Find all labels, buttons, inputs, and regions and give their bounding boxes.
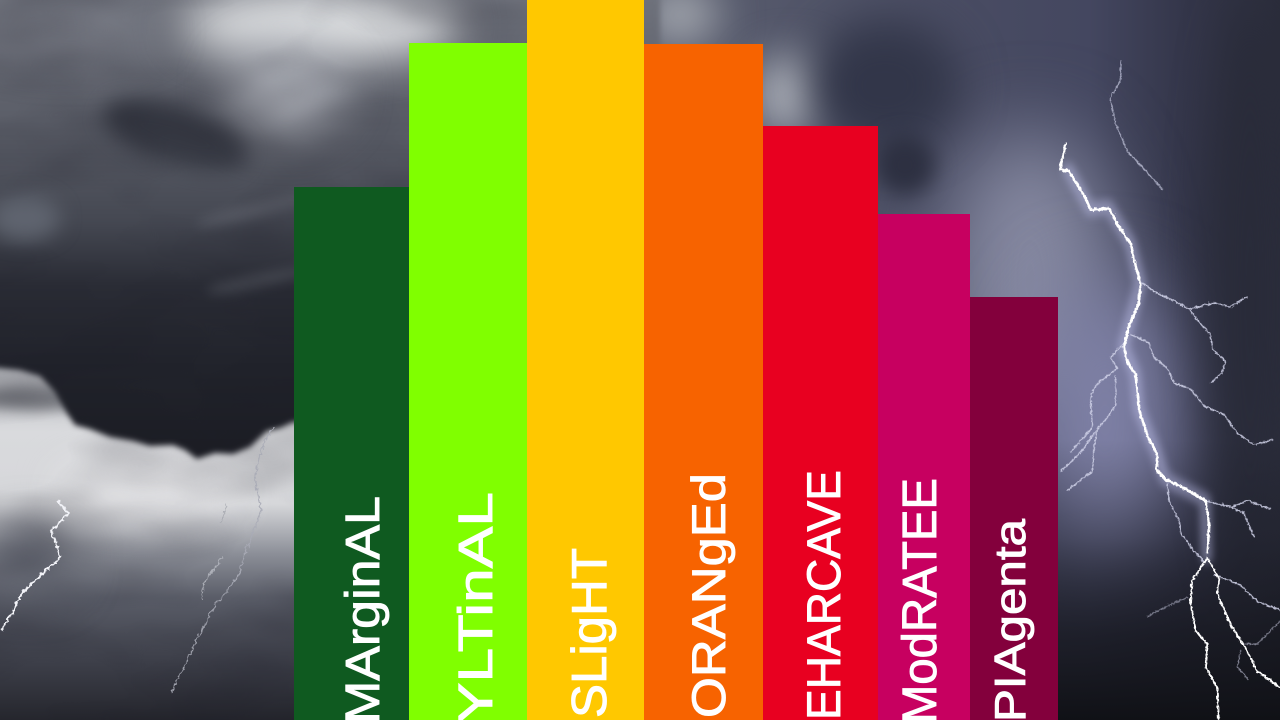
bar: Moderate: ModRATEE: [894, 478, 947, 720]
lightning: right side: [1059, 60, 1280, 720]
dark storm cloud mass: [0, 0, 660, 459]
bar: Magenta: [970, 297, 1058, 720]
bar: lime: YLTinAL: [450, 492, 503, 720]
bar: Enhanced: EHARCAVE: [797, 470, 850, 720]
bar: Slight: [527, 0, 644, 720]
bar chart: risk categories: [294, 0, 1058, 720]
dark upper band: [95, 85, 255, 185]
cloud streaks: [195, 190, 315, 230]
left sky below the cloud: [0, 0, 660, 720]
bright clouds at top: [180, 0, 460, 61]
bar: Enhanced: [763, 126, 878, 720]
bolt branches: [1060, 60, 1280, 679]
lightning: left side: [0, 427, 272, 691]
bar: Moderate: [878, 214, 970, 720]
right sky: [640, 0, 1280, 720]
bar: Marginal: MArginAL: [337, 496, 390, 720]
bar: Slight: SLigHT: [563, 548, 617, 718]
bar: Orange: ORANgEd: [682, 473, 735, 718]
bolt glow: [1068, 170, 1207, 557]
bar: Magenta: PIAgenta: [986, 518, 1035, 720]
bar: Orange: [644, 44, 763, 720]
bar: lime: [409, 43, 527, 720]
main bolt: [1059, 144, 1280, 720]
bar: Marginal: [294, 187, 409, 720]
cloud texture: [0, 0, 640, 720]
